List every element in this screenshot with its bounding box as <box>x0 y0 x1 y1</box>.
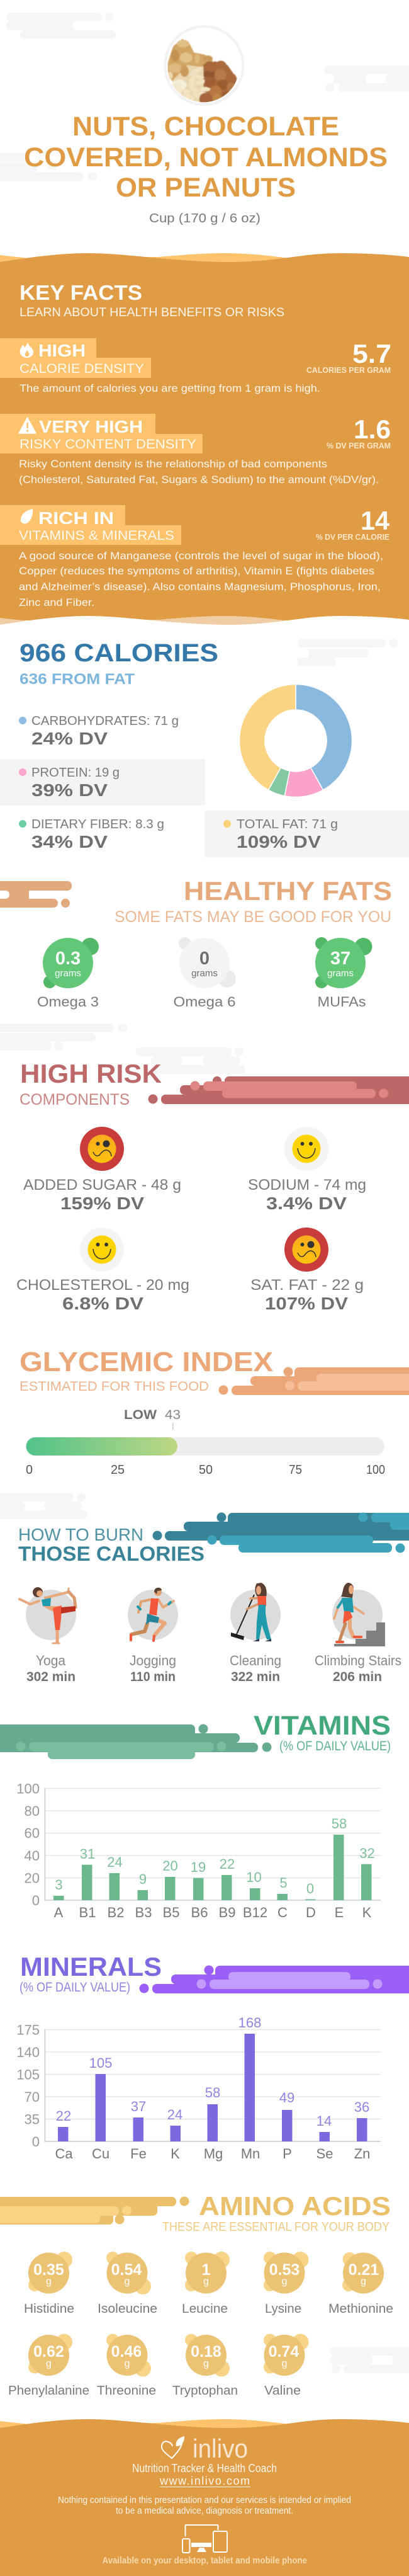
activity: jogging: 110 min <box>130 1670 176 1684</box>
stat: omega 3 <box>37 938 99 1010</box>
panel: key facts <box>0 253 409 630</box>
fact: rich in vitamins and minerals: A good source of Manganese (controls the level of sugar in the blood), <box>19 550 383 562</box>
heading: key facts: KEY FACTS <box>20 281 142 304</box>
decoration: burn streak <box>152 1513 409 1553</box>
fact: high calorie density: 5.7 <box>352 339 391 368</box>
fact: rich in vitamins and minerals: VITAMINS & MINERALS <box>19 528 174 543</box>
amino: methionine: 0.21 <box>349 2261 379 2279</box>
amino: threonine: g <box>125 2358 130 2369</box>
bar chart: vitamins: A <box>54 1905 64 1920</box>
decoration: glycemic streak <box>219 1367 409 1395</box>
fact: very high risky content density: Risky Content density is the relationship of bad components <box>19 459 327 470</box>
amino: methionine: Methionine <box>328 2302 393 2316</box>
legend: dietary fiber: 34% DV <box>31 832 108 852</box>
bar chart: minerals: 24 <box>167 2107 182 2123</box>
gauge scale: 0 <box>26 1463 33 1477</box>
bar chart: vitamins: K <box>362 1905 372 1920</box>
activity: cleaning <box>230 1583 281 1684</box>
bar chart: minerals: 140 <box>16 2044 40 2060</box>
footer tagline <box>132 2462 277 2487</box>
risk: added sugar: 159% DV <box>60 1194 144 1213</box>
legend: dietary fiber: DIETARY FIBER: 8.3 g <box>31 818 164 831</box>
stat: omega 3: Omega 3 <box>37 994 99 1010</box>
activity: cleaning: Cleaning <box>230 1653 281 1668</box>
fact: high calorie density: The amount of calories you are getting from 1 gram is high. <box>20 383 320 394</box>
amino: lysine: 0.53 <box>269 2261 300 2279</box>
fact: rich in vitamins and minerals: RICH IN <box>38 508 114 528</box>
amino: threonine <box>97 2334 156 2398</box>
bar chart: vitamins: 0 <box>306 1881 314 1896</box>
amino: valine: 0.74 <box>269 2343 299 2361</box>
gauge scale: 25 <box>111 1463 125 1477</box>
amino: histidine: 0.35 <box>33 2261 64 2279</box>
bar chart: vitamins: B9 <box>219 1905 235 1920</box>
heading: key facts: LEARN ABOUT HEALTH BENEFITS OR RISKS <box>20 306 284 319</box>
bar chart: vitamins: 40 <box>25 1848 40 1864</box>
fact: rich in vitamins and minerals <box>0 505 390 608</box>
heading: vitamins: VITAMINS <box>254 1711 391 1741</box>
icon: warning triangle <box>19 418 36 433</box>
amino: isoleucine: 0.54 <box>111 2261 142 2279</box>
heading: how to burn: HOW TO BURN <box>18 1525 143 1544</box>
heading: key facts <box>20 281 284 319</box>
panel: vitamins <box>0 1711 391 1920</box>
availability note: Available on your desktop, tablet and mobile phone <box>102 2555 307 2566</box>
bar chart: vitamins <box>16 1781 381 1920</box>
fact: high calorie density: HIGH <box>38 341 86 360</box>
decoration: vitamins streak <box>0 1724 272 1759</box>
bar chart: minerals: 14 <box>317 2113 332 2129</box>
bar chart: minerals: P <box>283 2146 292 2162</box>
stat: mufas: grams <box>327 968 354 979</box>
logo: inlivo: inlivo <box>193 2434 248 2463</box>
activity: climbing stairs: 206 min <box>333 1670 382 1684</box>
icon: devices <box>182 2525 227 2553</box>
amino: lysine: g <box>282 2276 287 2287</box>
bar chart: vitamins: 80 <box>25 1803 40 1819</box>
bar chart: vitamins: 22 <box>220 1856 235 1872</box>
stat: omega 3: grams <box>55 968 81 979</box>
risk: cholesterol: 6.8% DV <box>62 1294 143 1313</box>
amino: phenylalanine: g <box>46 2358 52 2369</box>
bar chart: vitamins: B2 <box>108 1905 124 1920</box>
icon: nuts photo in ring <box>165 26 243 105</box>
bar chart: vitamins: B6 <box>191 1905 208 1920</box>
activity: yoga <box>20 1587 76 1684</box>
heading: minerals: (% OF DAILY VALUE) <box>20 1980 130 1995</box>
stat: omega 6: Omega 6 <box>174 994 235 1010</box>
amino: valine: g <box>282 2358 287 2369</box>
bar chart: vitamins: C <box>277 1905 288 1920</box>
bar chart: vitamins: 20 <box>162 1858 178 1874</box>
heading: how to burn: THOSE CALORIES <box>18 1542 204 1565</box>
decoration: minerals streak <box>140 1965 409 1993</box>
risk: cholesterol: CHOLESTEROL - 20 mg <box>16 1277 189 1294</box>
risk: sodium: SODIUM - 74 mg <box>248 1177 366 1194</box>
logo: inlivo <box>162 2434 248 2463</box>
fact: very high risky content density: % DV PER GRAM <box>327 441 391 450</box>
heading: amino acids: AMINO ACIDS <box>199 2191 391 2221</box>
panel: calories <box>0 639 409 857</box>
stat: mufas: MUFAs <box>317 994 366 1010</box>
bar chart: minerals: 168 <box>238 2015 261 2031</box>
panel: how to burn calories <box>18 1513 409 1684</box>
legend: protein: PROTEIN: 19 g <box>31 766 120 780</box>
panel: minerals <box>16 1952 409 2162</box>
gauge scale: 75 <box>289 1463 302 1477</box>
legend: carbohydrates: 24% DV <box>31 729 108 748</box>
bar chart: minerals: 37 <box>131 2099 146 2114</box>
bar chart: minerals: 175 <box>16 2022 40 2038</box>
bar chart: minerals: Cu <box>92 2146 109 2162</box>
amino: leucine: Leucine <box>182 2302 228 2316</box>
amino: leucine: 1 <box>202 2261 211 2279</box>
amino: histidine <box>24 2252 74 2316</box>
fact: high calorie density: CALORIE DENSITY <box>20 362 144 376</box>
risk: added sugar <box>23 1127 181 1213</box>
legend: dietary fiber <box>19 818 164 852</box>
bar chart: vitamins: 10 <box>246 1869 262 1885</box>
amino: methionine <box>328 2252 393 2316</box>
heading: vitamins: (% OF DAILY VALUE) <box>279 1739 391 1753</box>
fact: high calorie density: CALORIES PER GRAM <box>306 365 391 375</box>
heading: amino acids <box>162 2191 391 2234</box>
footer tagline: www.inlivo.com <box>159 2475 250 2487</box>
heading: how to burn <box>18 1525 204 1565</box>
amino: tryptophan: Tryptophan <box>172 2384 238 2398</box>
bar chart: vitamins: 20 <box>25 1871 40 1886</box>
heading: glycemic index: ESTIMATED FOR THIS FOOD <box>20 1379 209 1394</box>
amino: threonine: 0.46 <box>111 2343 142 2361</box>
bar chart: minerals: 105 <box>16 2067 40 2082</box>
risk: saturated fat: SAT. FAT - 22 g <box>250 1277 364 1294</box>
heading: amino acids: THESE ARE ESSENTIAL FOR YOUR BODY <box>162 2220 389 2234</box>
risk: sodium <box>248 1127 366 1213</box>
fact: rich in vitamins and minerals: % DV PER CALORIE <box>316 532 389 542</box>
fact: rich in vitamins and minerals: Copper (reduces the symptoms of arthritis), Vitamin E (fights diabetes <box>19 566 374 577</box>
legend: carbohydrates <box>19 714 179 748</box>
fact: rich in vitamins and minerals: and Alzheimer’s disease). Also contains Magnesium, Phosphorus, Iron, <box>19 581 381 593</box>
decoration: high risk streak <box>148 1076 409 1104</box>
stat: omega 6: 0 <box>199 949 210 969</box>
amino: valine: Valine <box>264 2384 301 2398</box>
decoration: healthy fats streak <box>0 881 72 908</box>
heading: healthy fats: HEALTHY FATS <box>184 876 392 906</box>
heading: calories: 966 CALORIES <box>20 639 218 667</box>
bar chart: vitamins: B12 <box>243 1905 267 1920</box>
activity: yoga: 302 min <box>26 1670 76 1684</box>
amino: tryptophan <box>172 2334 238 2398</box>
heading: vitamins <box>254 1711 391 1753</box>
amino: phenylalanine <box>8 2334 89 2398</box>
legend: protein <box>0 759 205 806</box>
amino: methionine: g <box>361 2276 366 2287</box>
fact: very high risky content density: VERY HIGH <box>39 417 143 436</box>
fact: high calorie density <box>0 338 391 394</box>
title: OR PEANUTS <box>116 173 296 203</box>
disclaimer <box>58 2495 351 2516</box>
gauge value: 43 <box>165 1408 181 1422</box>
legend: total fat <box>204 811 409 857</box>
icon: flame <box>20 341 33 358</box>
bar chart: vitamins: 60 <box>25 1825 40 1841</box>
bar chart: minerals: Zn <box>354 2146 370 2162</box>
bar chart: vitamins: B5 <box>163 1905 179 1920</box>
stat: omega 3: 0.3 <box>55 949 81 969</box>
bar chart: minerals: Ca <box>55 2146 73 2162</box>
heading: high risk: HIGH RISK <box>20 1059 162 1088</box>
panel: footer <box>0 2419 409 2576</box>
title: COVERED, NOT ALMONDS <box>24 142 388 173</box>
legend: protein: 39% DV <box>31 780 108 800</box>
bar chart: vitamins: 100 <box>16 1781 40 1796</box>
heading: glycemic index <box>20 1347 273 1394</box>
amino: histidine: g <box>46 2276 52 2287</box>
stat: mufas: 37 <box>330 949 350 969</box>
heading: calories: 636 FROM FAT <box>20 671 135 688</box>
bar chart: minerals: Fe <box>130 2146 147 2162</box>
bar chart: minerals <box>16 2015 381 2162</box>
bar chart: vitamins: 24 <box>107 1854 123 1870</box>
bar chart: vitamins: 31 <box>80 1846 95 1862</box>
bar chart: minerals: 58 <box>205 2085 220 2100</box>
heading: minerals: MINERALS <box>20 1952 162 1981</box>
amino: leucine <box>182 2252 230 2316</box>
risk: added sugar: ADDED SUGAR - 48 g <box>23 1177 181 1194</box>
heading: healthy fats: SOME FATS MAY BE GOOD FOR YOU <box>115 908 391 926</box>
amino: tryptophan: g <box>203 2358 209 2369</box>
amino: isoleucine: g <box>125 2276 130 2287</box>
decoration: amino streak <box>0 2197 189 2225</box>
footer tagline: Nutrition Tracker & Health Coach <box>132 2462 277 2475</box>
bar chart: vitamins: E <box>335 1905 344 1920</box>
bar chart: vitamins: 19 <box>191 1859 206 1875</box>
activity: yoga: Yoga <box>36 1653 66 1668</box>
heading: high risk: COMPONENTS <box>20 1091 130 1108</box>
bar chart: minerals: 49 <box>279 2090 294 2106</box>
activity: jogging <box>128 1588 178 1684</box>
activity: climbing stairs: Climbing Stairs <box>315 1653 401 1668</box>
risk: saturated fat <box>250 1228 364 1313</box>
bar chart: minerals: K <box>171 2146 180 2162</box>
heading: calories <box>20 639 218 688</box>
amino: tryptophan: 0.18 <box>191 2343 221 2361</box>
amino: lysine <box>264 2252 308 2316</box>
gauge scale: 100 <box>366 1463 385 1477</box>
panel: high risk <box>16 1059 409 1313</box>
amino: isoleucine <box>98 2252 157 2316</box>
fact: rich in vitamins and minerals: Zinc and Fiber. <box>19 597 94 608</box>
bar chart: minerals: 35 <box>25 2111 40 2128</box>
gauge scale: 50 <box>199 1463 213 1477</box>
risk: cholesterol <box>16 1228 189 1313</box>
amino: phenylalanine: Phenylalanine <box>8 2384 89 2398</box>
activity: cleaning: 322 min <box>231 1670 280 1684</box>
bar chart: minerals: 22 <box>56 2108 71 2124</box>
fact: rich in vitamins and minerals: 14 <box>361 506 390 535</box>
heading: healthy fats <box>115 876 392 926</box>
panel: amino acids <box>0 2191 393 2398</box>
risk: sodium: 3.4% DV <box>266 1194 347 1213</box>
bar chart: vitamins: 3 <box>55 1877 63 1893</box>
risk: saturated fat: 107% DV <box>265 1294 348 1313</box>
bar chart: minerals: 0 <box>32 2134 40 2150</box>
activity: jogging: Jogging <box>130 1653 176 1668</box>
bar chart: vitamins: 5 <box>279 1875 288 1891</box>
bar chart: vitamins: 0 <box>32 1893 40 1908</box>
disclaimer: Nothing contained in this presentation and our services is intended or implied <box>58 2495 351 2505</box>
bar chart: minerals: Mn <box>241 2146 260 2162</box>
bar chart: vitamins: B3 <box>135 1905 152 1920</box>
bar chart: vitamins: 9 <box>139 1871 147 1887</box>
heading: high risk <box>20 1059 162 1108</box>
amino: leucine: g <box>203 2276 209 2287</box>
title: NUTS, CHOCOLATE <box>72 111 339 142</box>
panel: healthy fats <box>0 876 392 1010</box>
icon: leaf <box>21 509 33 523</box>
bar chart: minerals: 105 <box>89 2055 112 2071</box>
disclaimer: to be a medical advice, diagnosis or treatment. <box>116 2505 293 2516</box>
stat: omega 6: grams <box>191 968 218 979</box>
legend: total fat: 109% DV <box>237 832 321 852</box>
amino: valine <box>264 2334 308 2398</box>
bar chart: vitamins: 32 <box>359 1845 375 1861</box>
gauge value: LOW <box>124 1408 157 1422</box>
fact: very high risky content density <box>0 414 391 486</box>
bar chart: minerals: 36 <box>354 2099 369 2115</box>
amino: threonine: Threonine <box>97 2384 156 2398</box>
stat: mufas <box>315 937 373 1010</box>
fact: very high risky content density: (Cholesterol, Saturated Fat, Sugars & Sodium) to the amount (%DV/gr). <box>19 474 379 486</box>
gauge scale <box>26 1463 385 1477</box>
amino: phenylalanine: 0.62 <box>33 2343 64 2361</box>
fact: very high risky content density: RISKY CONTENT DENSITY <box>20 437 196 452</box>
bar chart: minerals: Se <box>317 2146 333 2162</box>
amino: histidine: Histidine <box>24 2302 74 2316</box>
serving size: Cup (170 g / 6 oz) <box>149 212 261 225</box>
legend: carbohydrates: CARBOHYDRATES: 71 g <box>31 714 179 728</box>
panel: glycemic index <box>20 1347 409 1477</box>
fact: very high risky content density: 1.6 <box>354 414 391 444</box>
gauge value <box>124 1408 181 1430</box>
title <box>24 111 388 203</box>
donut chart <box>239 684 352 797</box>
bar chart: vitamins: D <box>306 1905 316 1920</box>
bar chart: vitamins: 58 <box>332 1816 347 1832</box>
legend: total fat: TOTAL FAT: 71 g <box>237 818 338 831</box>
amino: isoleucine: Isoleucine <box>98 2302 157 2316</box>
gauge bar <box>26 1437 384 1456</box>
heading: minerals <box>20 1952 162 1995</box>
bar chart: minerals: Mg <box>204 2146 223 2162</box>
activity: climbing stairs <box>315 1583 401 1684</box>
stat: omega 6 <box>174 937 236 1010</box>
heading: glycemic index: GLYCEMIC INDEX <box>20 1347 273 1377</box>
amino: lysine: Lysine <box>265 2302 301 2316</box>
bar chart: minerals: 70 <box>25 2089 40 2105</box>
bar chart: vitamins: B1 <box>79 1905 96 1920</box>
